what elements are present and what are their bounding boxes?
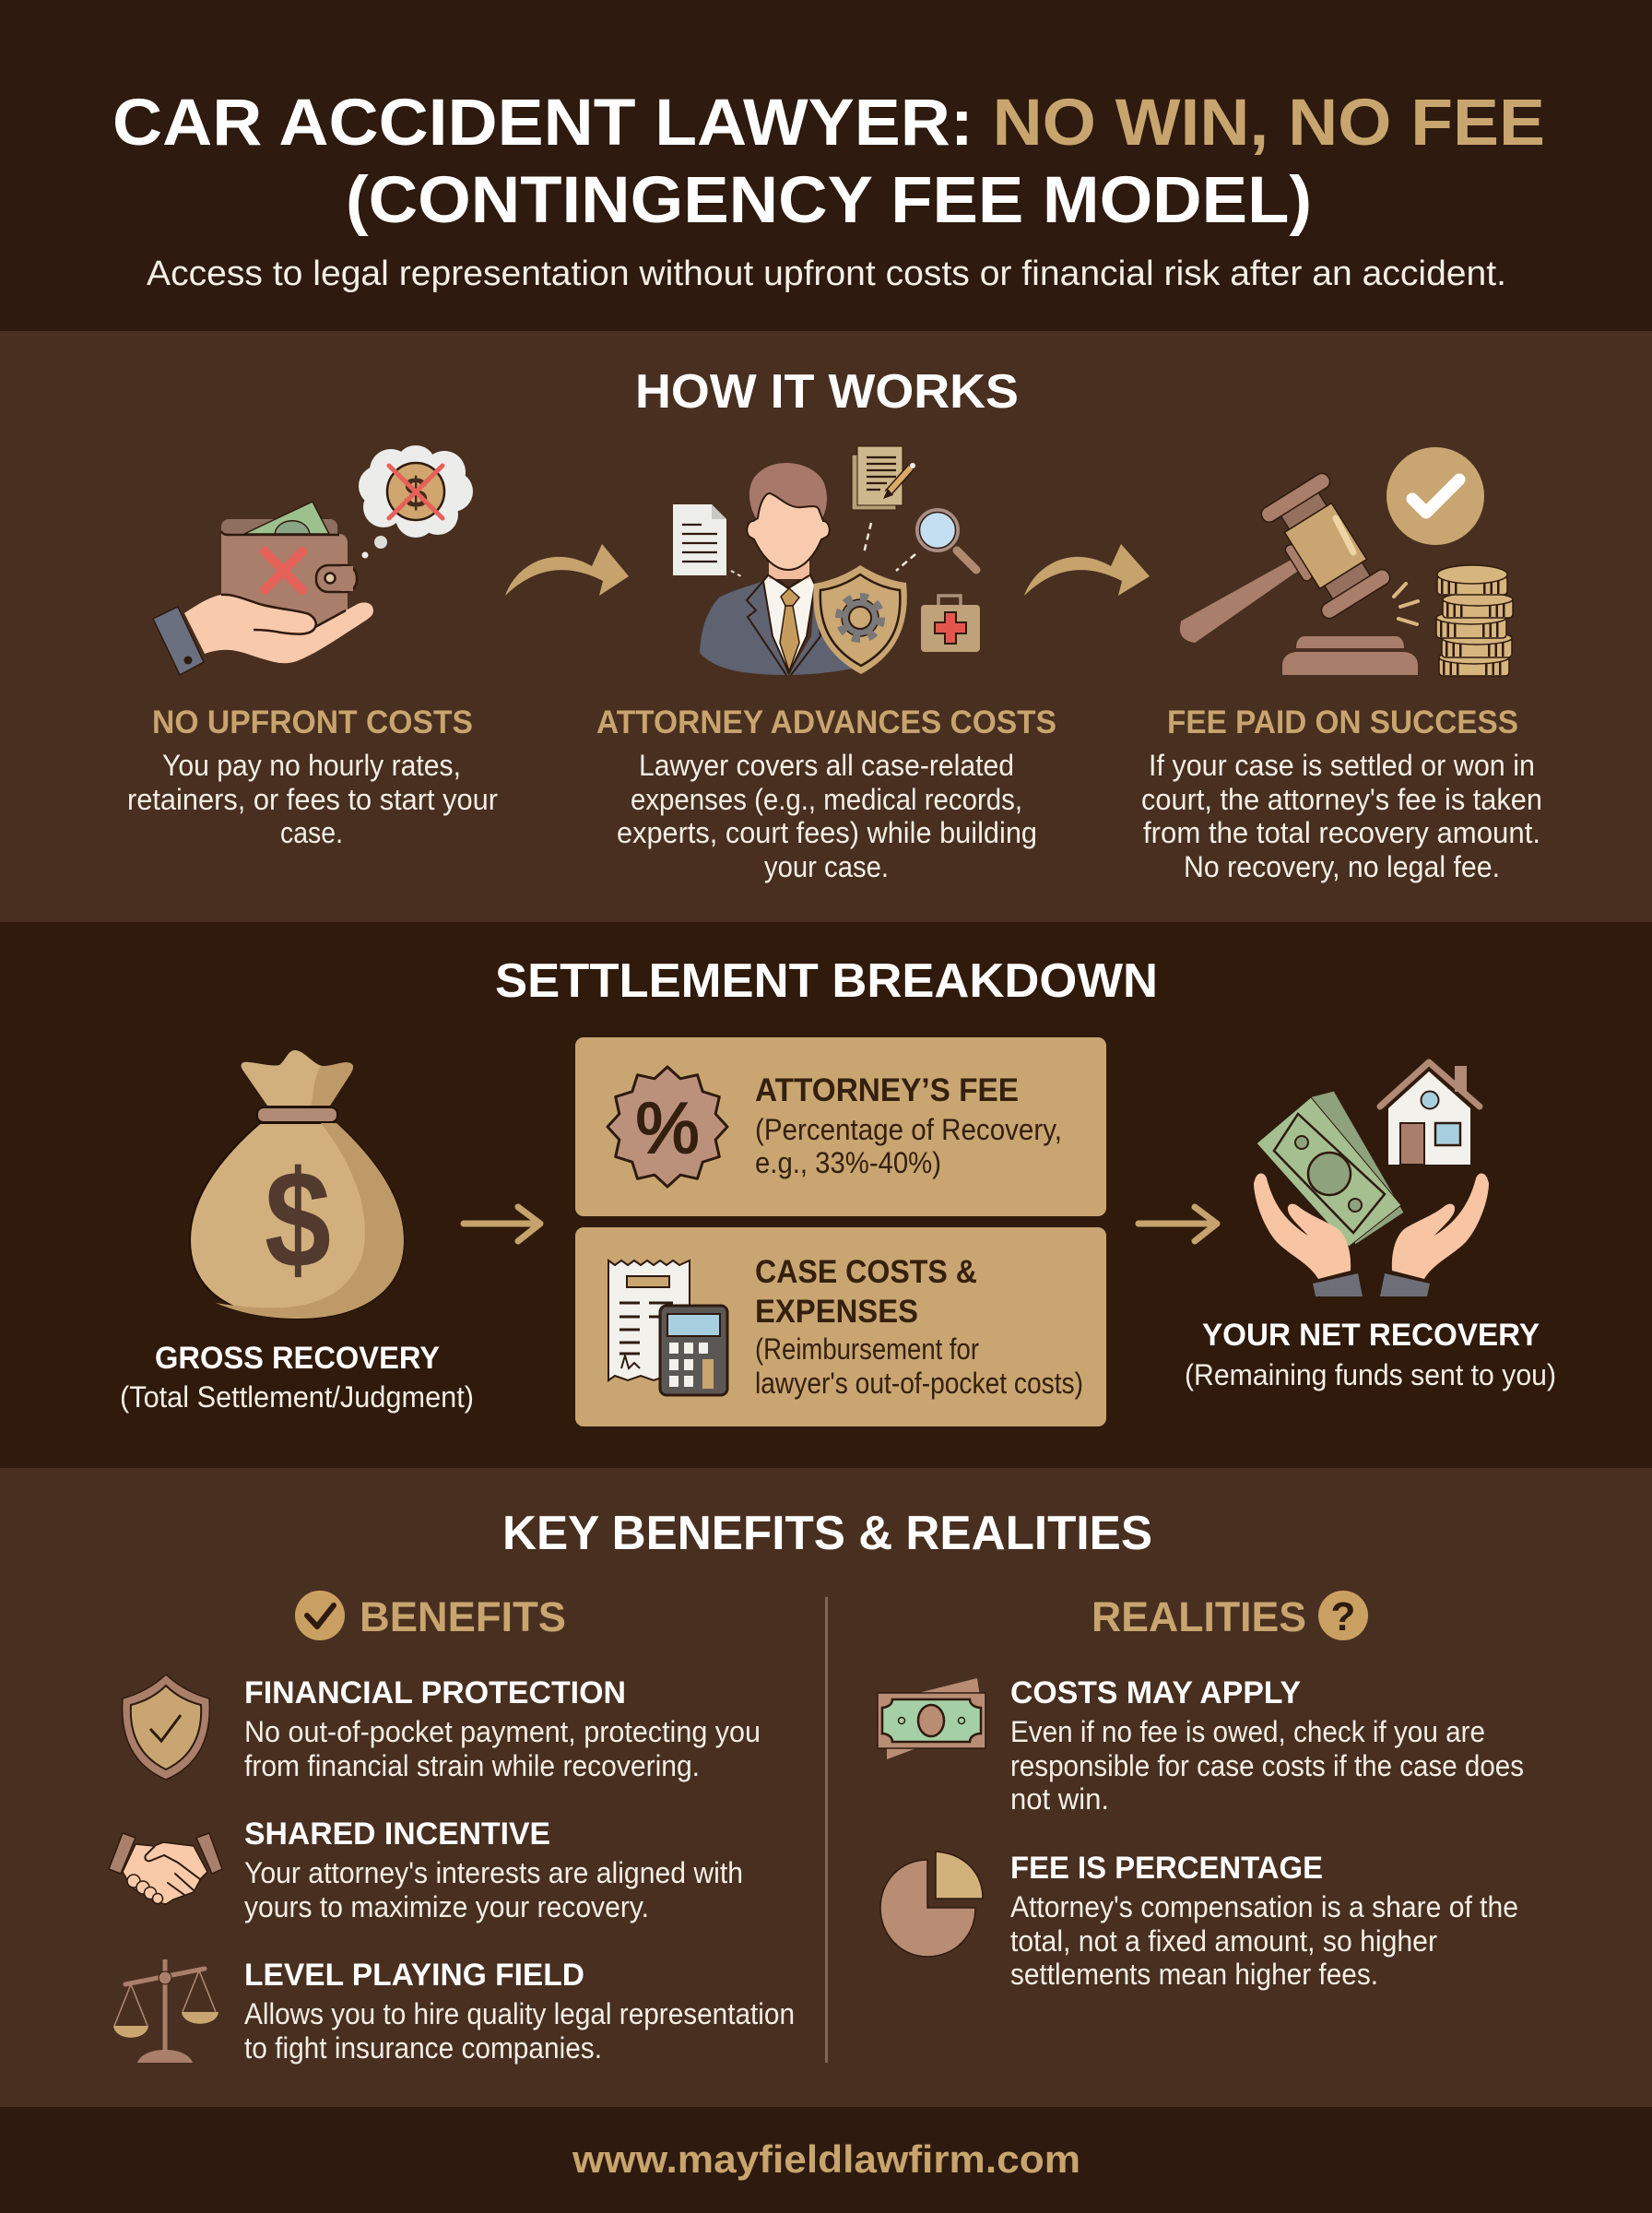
attorney's fee text: ATTORNEY’S FEE — [755, 1072, 1019, 1108]
band: how it works background — [0, 331, 1652, 922]
step 3 text: FEE PAID ON SUCCESS — [1167, 704, 1518, 740]
icon: pie chart — [880, 1852, 983, 1957]
step 2 text: expenses (e.g., medical records, — [631, 783, 1022, 816]
step 1 text: NO UPFRONT COSTS — [152, 704, 473, 740]
step 2 text — [596, 704, 1056, 883]
column heading: benefits: BENEFITS — [360, 1593, 566, 1640]
panel: attorney's fee — [575, 1037, 1106, 1216]
benefit: financial protection: FINANCIAL PROTECTION — [244, 1675, 626, 1710]
column heading: realities: ? — [1331, 1594, 1355, 1639]
step 2 text: your case. — [764, 850, 889, 883]
reality: costs may apply — [878, 1675, 1524, 1816]
reality: costs may apply: responsible for case costs if the case does — [1010, 1749, 1524, 1782]
benefit: shared incentive — [109, 1817, 743, 1923]
benefit: level playing field: LEVEL PLAYING FIELD — [244, 1958, 584, 1993]
reality: costs may apply: Even if no fee is owed, check if you are — [1010, 1715, 1485, 1748]
case costs text: lawyer's out-of-pocket costs) — [755, 1367, 1083, 1400]
reality: fee is percentage: Attorney's compensation is a share of the — [1010, 1890, 1518, 1923]
case costs text — [755, 1254, 1083, 1400]
title — [112, 87, 1545, 237]
band: benefits background — [0, 1468, 1652, 2107]
icon: handshake — [109, 1833, 222, 1904]
band: footer background — [0, 2107, 1652, 2213]
icon: scales of justice — [113, 1959, 218, 2063]
benefit: level playing field — [113, 1958, 795, 2065]
panel: case costs and expenses — [575, 1227, 1106, 1426]
icon: receipt and calculator — [608, 1260, 727, 1395]
subtitle: Access to legal representation without upfront costs or financial risk after an accident. — [147, 254, 1506, 293]
step 3 text: No recovery, no legal fee. — [1184, 850, 1500, 883]
benefit: financial protection: from financial strain while recovering. — [244, 1749, 700, 1782]
benefit: level playing field: to fight insurance companies. — [244, 2031, 602, 2065]
reality: fee is percentage — [880, 1851, 1518, 1991]
icon: gavel, check badge and coins — [1148, 447, 1513, 691]
step 3 text: If your case is settled or won in — [1149, 749, 1535, 782]
band: header background — [0, 0, 1652, 331]
step 1 text: You pay no hourly rates, — [162, 749, 461, 782]
case costs text: EXPENSES — [755, 1294, 918, 1330]
arrow: deductions to net — [1139, 1207, 1217, 1241]
reality: fee is percentage: settlements mean higher fees. — [1010, 1958, 1378, 1991]
icon: money bag: $ — [265, 1142, 331, 1296]
step 1 text: retainers, or fees to start your — [127, 783, 498, 816]
attorney's fee text — [755, 1072, 1062, 1179]
icon: wallet in hand with thought bubble: $ — [404, 468, 428, 516]
icon: percent badge: % — [635, 1087, 700, 1168]
benefit: shared incentive: yours to maximize your recovery. — [244, 1890, 649, 1923]
benefit: shared incentive: Your attorney's interests are aligned with — [244, 1856, 743, 1889]
step 2 text: Lawyer covers all case-related — [639, 749, 1014, 782]
heading: how it works: HOW IT WORKS — [635, 365, 1019, 419]
arrow: step 1 to step 2 — [505, 544, 629, 596]
reality: costs may apply: not win. — [1010, 1782, 1109, 1816]
reality: fee is percentage: total, not a fixed amount, so higher — [1010, 1924, 1437, 1958]
step 1 text — [127, 704, 498, 849]
heading: key benefits and realities: KEY BENEFITS & REALITIES — [502, 1507, 1152, 1560]
net recovery label — [1185, 1318, 1556, 1391]
icon: wallet in hand with thought bubble — [153, 445, 473, 675]
icon: money bag — [190, 1050, 404, 1319]
step 1 text: case. — [280, 816, 343, 849]
case costs text: (Reimbursement for — [755, 1332, 979, 1366]
attorney's fee text: e.g., 33%-40%) — [755, 1146, 941, 1179]
gross recovery label — [120, 1341, 474, 1414]
icon: banknotes — [878, 1678, 985, 1759]
gross recovery label: (Total Settlement/Judgment) — [120, 1380, 474, 1414]
icon: shield with check — [123, 1675, 209, 1780]
benefit: shared incentive: SHARED INCENTIVE — [244, 1817, 550, 1852]
title: CAR ACCIDENT LAWYER: NO WIN, NO FEE — [112, 87, 1545, 160]
benefit: level playing field: Allows you to hire quality legal representation — [244, 1997, 795, 2030]
gross recovery label: GROSS RECOVERY — [155, 1341, 440, 1376]
icon: hands holding money and house — [1254, 1062, 1489, 1296]
arrow: step 2 to step 3 — [1024, 544, 1150, 596]
step 2 text: ATTORNEY ADVANCES COSTS — [596, 704, 1056, 740]
icon: percent badge — [608, 1067, 727, 1187]
reality: fee is percentage: FEE IS PERCENTAGE — [1010, 1851, 1323, 1886]
arrow: gross to deductions — [464, 1207, 540, 1241]
step 2 text: experts, court fees) while building — [617, 816, 1037, 849]
reality: costs may apply: COSTS MAY APPLY — [1010, 1675, 1301, 1710]
step 3 text: court, the attorney's fee is taken — [1141, 783, 1542, 816]
benefit: financial protection — [123, 1675, 761, 1782]
title: (CONTINGENCY FEE MODEL) — [346, 164, 1312, 237]
benefit: financial protection: No out-of-pocket payment, protecting you — [244, 1715, 761, 1748]
attorney's fee text: (Percentage of Recovery, — [755, 1113, 1062, 1146]
net recovery label: (Remaining funds sent to you) — [1185, 1358, 1556, 1391]
icon: attorney with shield and documents — [673, 446, 980, 675]
case costs text: CASE COSTS & — [755, 1254, 977, 1290]
net recovery label: YOUR NET RECOVERY — [1202, 1318, 1540, 1353]
column heading: realities: REALITIES — [1092, 1593, 1306, 1640]
footer: website: www.mayfieldlawfirm.com — [572, 2137, 1080, 2181]
band: settlement background — [0, 922, 1652, 1468]
step 3 text — [1141, 704, 1542, 883]
heading: settlement breakdown: SETTLEMENT BREAKDOWN — [495, 954, 1158, 1008]
step 3 text: from the total recovery amount. — [1143, 816, 1540, 849]
